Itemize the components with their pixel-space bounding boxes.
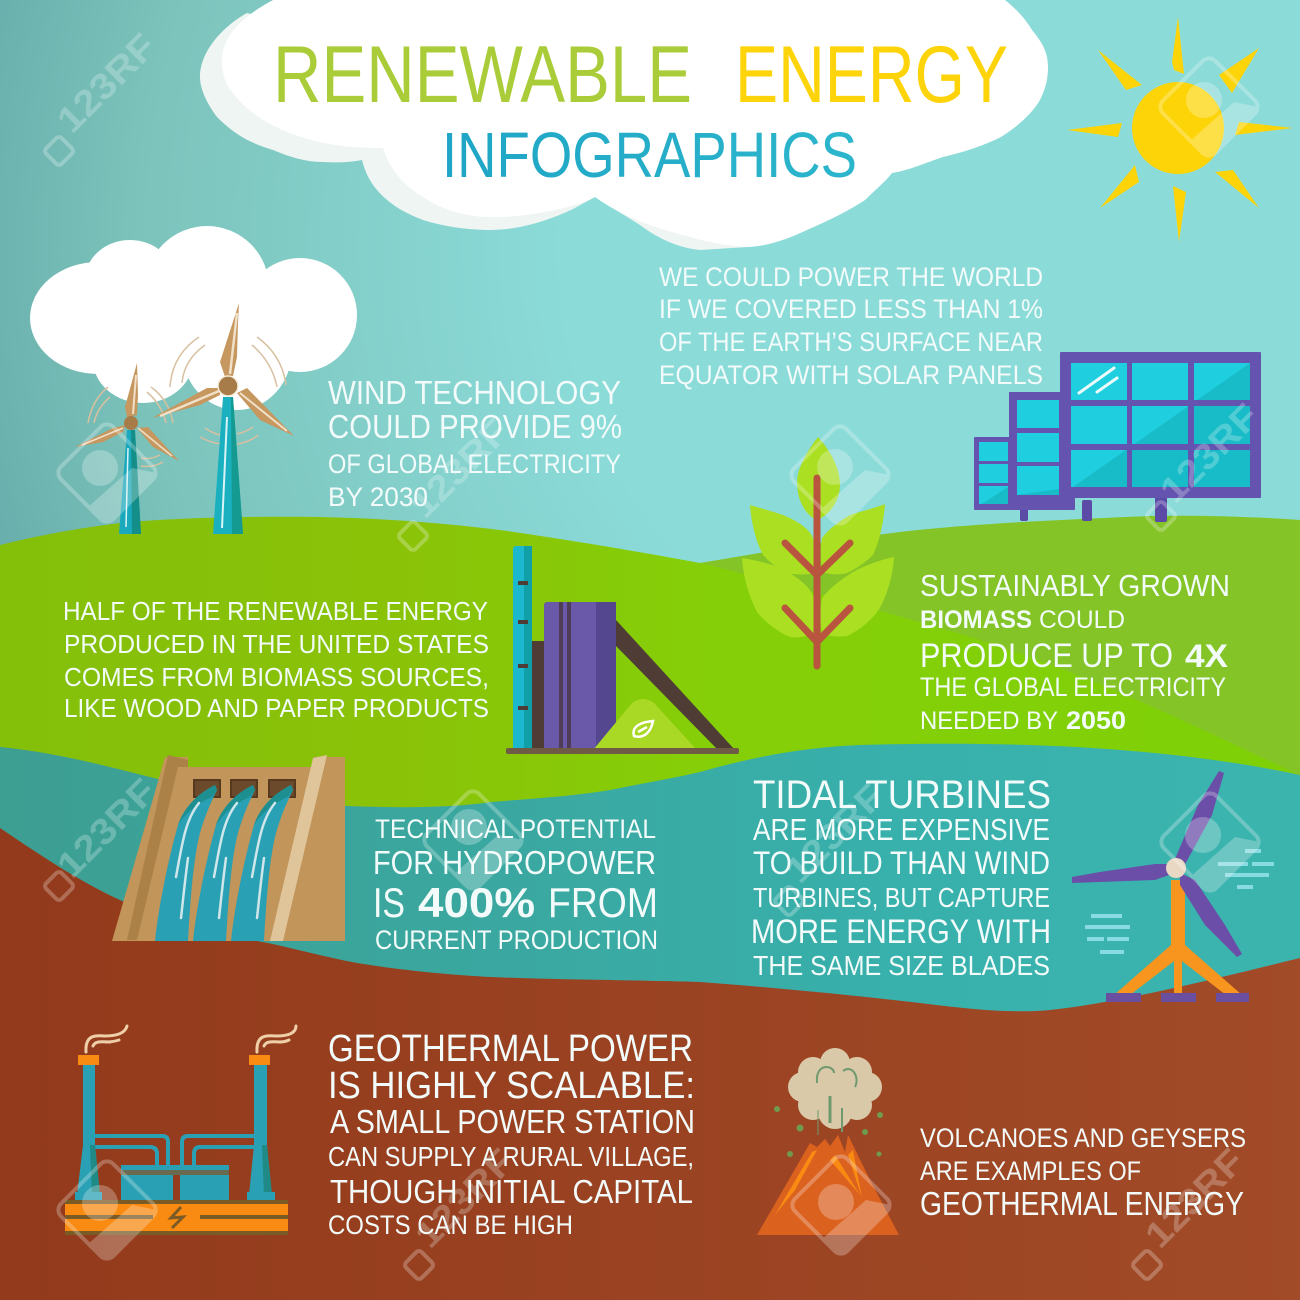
text: wind fact: BY 2030 <box>328 482 428 512</box>
text: biomass share fact: LIKE WOOD AND PAPER PRODUCTS <box>64 693 489 723</box>
text: biomass share fact: HALF OF THE RENEWABLE ENERGY <box>63 596 488 626</box>
text: volcano fact: ARE EXAMPLES OF <box>920 1156 1141 1186</box>
text: volcano fact: VOLCANOES AND GEYSERS <box>920 1123 1246 1153</box>
text: wind fact: OF GLOBAL ELECTRICITY <box>328 449 621 479</box>
text: wind fact <box>328 374 622 512</box>
text: tidal fact <box>751 773 1051 981</box>
main meadow <box>0 517 1300 850</box>
text: biomass share fact: COMES FROM BIOMASS SOURCES, <box>64 662 489 692</box>
text: geothermal fact: COSTS CAN BE HIGH <box>328 1210 573 1240</box>
text: solar panels fact: EQUATOR WITH SOLAR PANELS <box>659 360 1043 390</box>
watermark stamps: 123RF <box>1137 1140 1252 1256</box>
text: solar panels fact: OF THE EARTH’S SURFACE NEAR <box>659 327 1043 357</box>
icon: large wind turbine <box>152 303 294 534</box>
text: solar panels fact <box>659 262 1043 390</box>
text: hydropower fact: CURRENT PRODUCTION <box>375 925 658 955</box>
text: hydropower fact: FROM <box>548 879 658 926</box>
text: sustainable biomass fact: COULD <box>1039 606 1125 634</box>
sun <box>1067 17 1293 242</box>
title cloud <box>200 0 1048 250</box>
text: volcano fact <box>920 1123 1246 1222</box>
icon: tidal turbine <box>1072 771 1274 1002</box>
back hill right <box>600 516 1300 800</box>
title: renewable energy <box>273 30 1008 120</box>
watermark stamps: 123RF <box>407 1140 522 1256</box>
text: hydropower fact: FOR HYDROPOWER <box>373 844 656 881</box>
text: tidal fact: TIDAL TURBINES <box>753 773 1051 817</box>
text: sustainable biomass fact <box>920 568 1230 735</box>
text: sustainable biomass fact: BIOMASS <box>920 606 1032 634</box>
text: sustainable biomass fact: PRODUCE UP TO <box>920 637 1173 675</box>
watermark stamps: 123RF <box>777 775 892 891</box>
text: wind fact: WIND TECHNOLOGY <box>328 374 621 411</box>
text: biomass share fact: PRODUCED IN THE UNITED STATES <box>64 629 489 659</box>
text: tidal fact: THE SAME SIZE BLADES <box>753 950 1050 981</box>
text: solar panels fact: IF WE COVERED LESS THAN 1% <box>659 294 1043 324</box>
watermark stamps: 123RF <box>49 25 164 141</box>
title: renewable energy: RENEWABLE <box>273 30 692 120</box>
text: biomass share fact <box>63 596 489 723</box>
text: hydropower fact: 400% <box>418 879 535 926</box>
text: sustainable biomass fact: 2050 <box>1066 707 1126 735</box>
text: hydropower fact: IS <box>373 879 405 926</box>
icon: volcano <box>757 1048 899 1235</box>
text: volcano fact: GEOTHERMAL ENERGY <box>920 1185 1244 1222</box>
icon: geothermal power station <box>65 1026 296 1235</box>
text: geothermal fact <box>328 1028 695 1240</box>
text: wind fact: COULD PROVIDE 9% <box>328 408 622 445</box>
icon: small wind turbine <box>75 363 179 534</box>
text: tidal fact: MORE ENERGY WITH <box>751 913 1051 951</box>
title: renewable energy: ENERGY <box>735 30 1008 120</box>
icon: biomass plant <box>506 546 739 754</box>
watermark stamps: 123RF <box>402 410 517 526</box>
text: geothermal fact: CAN SUPPLY A RURAL VILLAGE, <box>328 1141 694 1172</box>
icon: biomass leaf tree <box>742 437 894 666</box>
text: geothermal fact: IS HIGHLY SCALABLE: <box>328 1065 695 1107</box>
watermark stamps: 123RF <box>1152 395 1267 511</box>
water band <box>0 744 1300 1050</box>
icon: hydro dam <box>112 755 345 941</box>
watermark stamps: 123RF <box>49 770 164 886</box>
ground band <box>0 828 1300 1300</box>
text: sustainable biomass fact: NEEDED BY <box>920 707 1058 735</box>
wind cloud <box>30 226 357 410</box>
text: geothermal fact: GEOTHERMAL POWER <box>328 1028 693 1070</box>
text: sustainable biomass fact: SUSTAINABLY GROWN <box>920 568 1230 603</box>
text: tidal fact: ARE MORE EXPENSIVE <box>753 812 1050 847</box>
text: sustainable biomass fact: 4X <box>1185 638 1229 674</box>
text: hydropower fact <box>373 814 658 955</box>
text: hydropower fact: TECHNICAL POTENTIAL <box>375 814 656 844</box>
text: solar panels fact: WE COULD POWER THE WORLD <box>659 262 1043 292</box>
text: sustainable biomass fact: THE GLOBAL ELECTRICITY <box>920 672 1226 702</box>
text: tidal fact: TO BUILD THAN WIND <box>753 845 1050 881</box>
text: geothermal fact: A SMALL POWER STATION <box>330 1103 695 1140</box>
text: geothermal fact: THOUGH INITIAL CAPITAL <box>330 1173 693 1210</box>
icon: solar panels <box>974 352 1261 522</box>
text: tidal fact: TURBINES, BUT CAPTURE <box>753 882 1050 913</box>
title: infographics: INFOGRAPHICS <box>442 119 857 191</box>
